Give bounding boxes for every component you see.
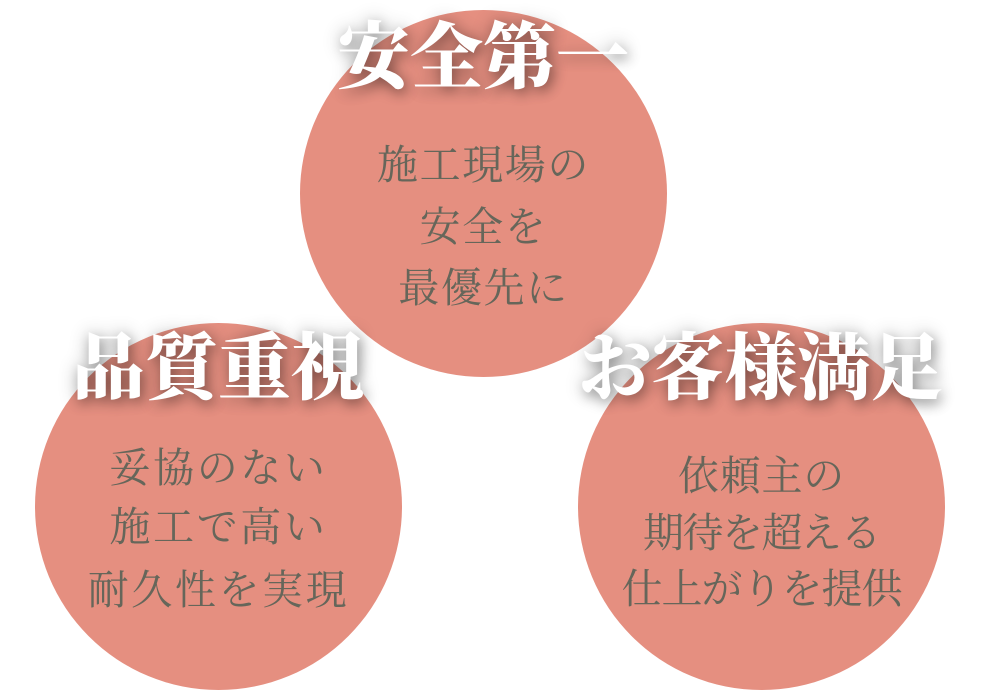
- text: safety description: 施工現場の: [377, 142, 590, 188]
- panel: quality focus: [35, 323, 402, 690]
- heading: safety first: 安全第一: [337, 17, 629, 98]
- circle: safety: [300, 10, 667, 377]
- heading: quality focus: 品質重視: [72, 328, 364, 409]
- text: customer description: 仕上がりを提供: [622, 566, 902, 612]
- panel: customer satisfaction: [576, 323, 948, 690]
- text: safety description: 安全を: [420, 204, 547, 250]
- text: quality description: [88, 445, 349, 613]
- text: quality description: 施工で高い: [110, 504, 328, 550]
- panel: safety first: [300, 10, 667, 377]
- text: safety description: 最優先に: [398, 265, 569, 311]
- text: customer description: [622, 453, 902, 612]
- circle: customer: [578, 323, 945, 690]
- heading: customer satisfaction: お客様満足: [578, 328, 944, 409]
- circle: quality: [35, 323, 402, 690]
- text: quality description: 妥協のない: [110, 445, 328, 491]
- text: safety description: [377, 142, 590, 311]
- text: quality description: 耐久性を実現: [88, 567, 349, 613]
- text: customer description: 依頼主の: [678, 453, 845, 499]
- text: customer description: 期待を超える: [643, 510, 880, 556]
